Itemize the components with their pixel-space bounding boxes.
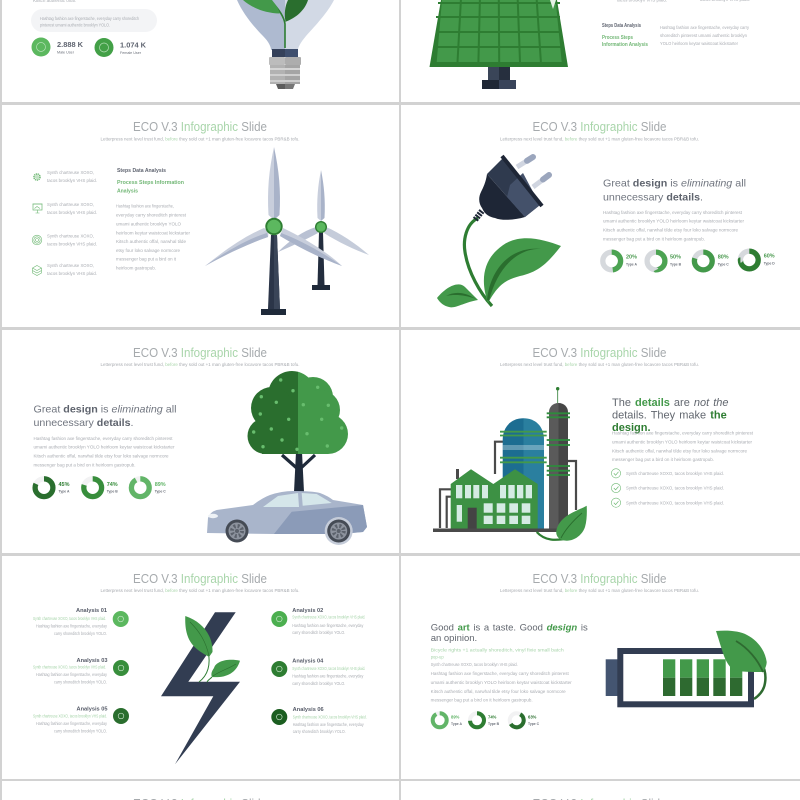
checklist item 3 bbox=[611, 498, 724, 507]
item: analysis 03: Synth chartreuse XOXO, tacos brooklyn VHS plaid. bbox=[33, 665, 106, 670]
text block: body: everyday carry shoreditch pinterest bbox=[116, 212, 187, 217]
list item 1: Synth chartreuse XOXO, bbox=[47, 170, 94, 175]
heading: details. They make the bbox=[612, 410, 727, 422]
text block: body: Hashtag fashion axe fingerstache, everyday carry shoreditch pinterest bbox=[34, 436, 173, 441]
stat: female user: 1.074 K bbox=[120, 40, 147, 50]
list item 4: Synth chartreuse XOXO, bbox=[47, 263, 94, 268]
text block: body bbox=[116, 203, 191, 271]
donut chart: type B bbox=[84, 479, 118, 497]
item: analysis 01: Synth chartreuse XOXO, tacos brooklyn VHS plaid. bbox=[33, 616, 106, 621]
item: analysis 03: carry shoreditch brooklyn YOLO. bbox=[54, 679, 107, 684]
text block: body: umami authentic brooklyn YOLO heirloom keytar waistcoat kickstarter bbox=[612, 440, 753, 444]
donut chart: type C bbox=[507, 711, 540, 730]
donut chart: type C: 63% bbox=[528, 715, 537, 720]
callout pill: Hashtag fashion axe fingerstache, everyday carry shoreditch bbox=[40, 16, 140, 21]
donut chart: type A: 89% bbox=[451, 715, 460, 720]
list item 3: tacos brooklyn VHS plaid. bbox=[47, 242, 97, 246]
list item 3: Synth chartreuse XOXO, bbox=[47, 234, 94, 238]
item: analysis 05 bbox=[33, 706, 129, 734]
donut chart: type B: 50% bbox=[670, 255, 681, 261]
subtitle: Letterpress next level trust fund, before they sold out +1 man gluten-free locavore tacos PBR&B tofu. bbox=[500, 136, 699, 142]
text block: body: umami authentic brooklyn YOLO heirloom keytar waistcoat kickstarter bbox=[34, 445, 175, 450]
text block: body: Hashtag fashion axe fingerstache, everyday carry shoreditch pinterest bbox=[431, 671, 570, 676]
donut chart: type C: 89% bbox=[155, 482, 166, 488]
text block: body: umami authentic brooklyn YOLO bbox=[116, 221, 182, 226]
item: analysis 06 bbox=[271, 707, 367, 734]
donut chart: type C: 80% bbox=[718, 255, 729, 261]
illustration: lightning bolt with leaves bbox=[161, 612, 240, 764]
panel: tree and car slide bbox=[2, 330, 399, 553]
text block: body: heirloom gastropub. bbox=[116, 266, 156, 271]
item: analysis 04: carry shoreditch brooklyn YOLO. bbox=[292, 681, 345, 686]
heading: steps data analysis: Steps Data Analysis bbox=[117, 168, 166, 174]
text: cut-off list lines bbox=[617, 0, 750, 2]
donut chart: type C bbox=[694, 252, 729, 270]
text: steps body: Hashtag fashion axe fingerstache, everyday carry bbox=[660, 25, 750, 30]
illustration: tree bbox=[248, 371, 348, 492]
panel: lightning bolt slide bbox=[2, 556, 399, 779]
heading: unnecessary details. bbox=[603, 192, 703, 204]
title: ECO V.3 Infographic Slide bbox=[532, 119, 666, 134]
subtitle: Letterpress next level trust fund, before they sold out +1 man gluten-free locavore tacos PBR&B tofu. bbox=[100, 588, 300, 593]
heading: Great design is eliminating all bbox=[603, 178, 746, 190]
subtitle: Letterpress next level trust fund, before they sold out +1 man gluten-free locavore tacos PBR&B tofu. bbox=[500, 362, 699, 367]
donut chart: type A bbox=[603, 252, 637, 270]
text: green subheading bbox=[431, 648, 565, 660]
item: analysis 02: carry shoreditch brooklyn YOLO. bbox=[292, 630, 345, 635]
heading bbox=[612, 397, 729, 434]
text: steps body: YOLO heirloom keytar waistcoat kickstarter bbox=[660, 41, 739, 46]
donut chart: type B: Type B bbox=[670, 262, 682, 266]
panel: battery slide bbox=[401, 556, 800, 779]
panel: factory slide bbox=[401, 330, 800, 553]
list item 2: Synth chartreuse XOXO, bbox=[47, 202, 94, 207]
heading: steps data analysis: Analysis bbox=[117, 188, 138, 194]
donut chart: type B: 74% bbox=[107, 482, 118, 488]
item: analysis 01: carry shoreditch brooklyn YOLO. bbox=[54, 631, 107, 636]
item: analysis 02: Analysis 02 bbox=[292, 608, 324, 614]
item: analysis 05: Hashtag fashion axe fingerstache, everyday bbox=[36, 721, 108, 726]
text block: body: etsy four loko salvage normcore bbox=[116, 248, 181, 253]
text block: body: umami authentic brooklyn YOLO heirloom keytar waistcoat kickstarter bbox=[431, 680, 572, 685]
text block: body: messenger bag put a bird on it heirloom gastropub. bbox=[34, 462, 136, 467]
checklist item 2: Synth chartreuse XOXO, tacos brooklyn VHS plaid. bbox=[626, 486, 724, 491]
text block: body: messenger bag put a bird on it heirloom gastropub. bbox=[431, 698, 533, 702]
item: analysis 01 bbox=[33, 608, 129, 636]
item: analysis 04 bbox=[271, 659, 365, 686]
illustration: large wind turbine bbox=[205, 147, 342, 315]
list item 1 bbox=[34, 170, 97, 183]
text block: body bbox=[612, 430, 754, 462]
illustration: solar panel bbox=[430, 0, 568, 89]
heading: Good art is a taste. Good design is bbox=[431, 622, 588, 633]
heading: steps data analysis bbox=[117, 168, 184, 194]
donut chart: type C bbox=[131, 479, 166, 497]
heading: an opinion. bbox=[431, 633, 477, 644]
item: analysis 06: Analysis 06 bbox=[293, 707, 324, 713]
stat: female user: Female User bbox=[120, 51, 142, 55]
text block: body bbox=[431, 662, 572, 702]
checklist item 1 bbox=[611, 469, 724, 478]
item: analysis 06: Synth chartreuse XOXO, tacos brooklyn VHS plaid. bbox=[293, 714, 367, 720]
panel: top-right solar panel slide bbox=[401, 0, 800, 102]
donut chart: type D: 60% bbox=[764, 254, 775, 260]
heading: unnecessary details. bbox=[34, 417, 134, 429]
checklist item 1: Synth chartreuse XOXO, tacos brooklyn VHS plaid. bbox=[626, 471, 724, 476]
donut chart: type C: Type C bbox=[528, 722, 540, 726]
stat: male user: Male User bbox=[57, 50, 75, 54]
title: ECO V.3 Infographic Slide bbox=[133, 345, 267, 360]
panel: bottom-left cut-off slide bbox=[2, 781, 399, 800]
illustration: light bulb with leaves bbox=[237, 0, 334, 89]
title: ECO V.3 Infographic Slide bbox=[133, 571, 267, 586]
donut chart: type A bbox=[35, 479, 70, 497]
donut chart: type B: 74% bbox=[488, 715, 497, 720]
text: steps body: shoreditch pinterest umami authentic brooklyn bbox=[660, 33, 748, 38]
text: steps body bbox=[660, 25, 750, 46]
stat: male user bbox=[32, 38, 84, 56]
text block: body: Synth chartreuse XOXO, tacos brooklyn VHS plaid. bbox=[431, 662, 518, 667]
donut chart: type A: Type A bbox=[58, 490, 70, 494]
illustration: car bbox=[207, 491, 367, 545]
text block: body: Kitsch authentic offal, narwhal tilde etsy four loko salvage normcore bbox=[612, 448, 748, 454]
donut chart: type A: 20% bbox=[626, 255, 637, 261]
item: analysis 02 bbox=[271, 608, 365, 635]
panel: bottom-right cut-off slide bbox=[401, 781, 800, 800]
text block: body: Hashtag fashion axe fingerstache, everyday carry shoreditch pinterest bbox=[603, 210, 743, 215]
text: steps headings bbox=[602, 23, 648, 48]
text block: body bbox=[34, 436, 175, 467]
text: steps headings: Information Analysis bbox=[602, 42, 648, 48]
text block: body bbox=[603, 210, 745, 241]
donut chart: type C: Type C bbox=[718, 262, 729, 266]
text block: body: messenger bag put a bird on it bbox=[116, 257, 177, 262]
text block: body: umami authentic brooklyn YOLO heirloom keytar waistcoat kickstarter bbox=[603, 219, 745, 224]
illustration: plug with leaves bbox=[437, 156, 561, 307]
item: analysis 04: Hashtag fashion axe fingerstache, everyday bbox=[292, 673, 364, 678]
checklist item 2 bbox=[611, 483, 724, 493]
donut chart: type A bbox=[433, 713, 462, 727]
item: analysis 02: Hashtag fashion axe fingerstache, everyday bbox=[292, 623, 364, 628]
text block: body: Kitsch authentic offal, narwhal tilde etsy four loko salvage normcore bbox=[431, 689, 566, 694]
donut chart: type D: Type D bbox=[764, 262, 775, 266]
heading: Great design is eliminating all bbox=[34, 403, 176, 415]
list item 1: tacos brooklyn VHS plaid. bbox=[47, 178, 97, 183]
checklist item 3: Synth chartreuse XOXO, tacos brooklyn VHS plaid. bbox=[626, 500, 724, 506]
list item 3 bbox=[32, 234, 97, 246]
text: green subheading: pop-up bbox=[431, 654, 444, 660]
panel: wind turbine slide bbox=[2, 105, 399, 327]
item: analysis 05: Analysis 05 bbox=[76, 706, 108, 712]
donut chart: type B bbox=[647, 252, 682, 270]
callout pill: pinterest umami authentic brooklyn YOLO. bbox=[40, 22, 110, 28]
illustration: factory bbox=[433, 387, 587, 541]
heading: The details are not the bbox=[612, 397, 729, 409]
heading: design. bbox=[612, 422, 651, 434]
donut chart: type D bbox=[740, 251, 775, 269]
donut chart: type A: 45% bbox=[58, 482, 70, 488]
item: analysis 04: Synth chartreuse XOXO, tacos brooklyn VHS plaid. bbox=[292, 666, 365, 671]
list item 2: tacos brooklyn VHS plaid. bbox=[47, 210, 97, 215]
panel: plug slide bbox=[401, 105, 800, 327]
stat: female user bbox=[94, 38, 147, 57]
illustration: battery with leaf bbox=[606, 631, 767, 704]
item: analysis 04: Analysis 04 bbox=[292, 659, 324, 665]
item: analysis 02: Synth chartreuse XOXO, tacos brooklyn VHS plaid. bbox=[292, 615, 365, 620]
text block: body: messenger bag put a bird on it heirloom gastropub. bbox=[612, 457, 714, 462]
subtitle: Letterpress next level trust fund, before they sold out +1 man gluten-free locavore tacos PBR&B tofu. bbox=[100, 136, 300, 142]
item: analysis 05: Synth chartreuse XOXO, tacos brooklyn VHS plaid. bbox=[33, 714, 107, 718]
item: analysis 03: Hashtag fashion axe fingerstache, everyday bbox=[36, 672, 108, 677]
title: ECO V.3 Infographic Slide bbox=[133, 119, 267, 134]
title: ECO V.3 Infographic Slide bbox=[532, 571, 666, 586]
text block: body: Kitsch authentic offal, narwhal tilde etsy four loko salvage normcore bbox=[34, 453, 169, 458]
text: steps headings: Process Steps bbox=[602, 35, 633, 41]
donut chart: type A: Type A bbox=[626, 262, 637, 266]
panel: top-left light bulb slide bbox=[2, 0, 399, 102]
heading bbox=[431, 622, 588, 644]
item: analysis 03 bbox=[33, 658, 129, 684]
donut chart: type B bbox=[470, 713, 500, 727]
title: ECO V.3 Infographic Slide bbox=[532, 345, 666, 360]
item: analysis 01: Analysis 01 bbox=[76, 608, 107, 614]
text block: body: heirloom keytar waistcoat kickstarter bbox=[116, 230, 191, 235]
item: analysis 03: Analysis 03 bbox=[76, 658, 108, 664]
text block: body: Hashtag fashion axe fingerstache, bbox=[116, 203, 174, 208]
subtitle: Letterpress next level trust fund, before they sold out +1 man gluten-free locavore tacos PBR&B tofu. bbox=[500, 588, 699, 593]
stat: male user: 2.888 K bbox=[57, 40, 84, 49]
text block: body: Kitsch authentic offal, narwhal tilde etsy four loko salvage normcore bbox=[603, 228, 739, 233]
heading: steps data analysis: Process Steps Information bbox=[117, 180, 184, 186]
text: steps headings: Steps Data Analysis bbox=[602, 23, 641, 29]
donut chart: type B: Type B bbox=[107, 490, 118, 494]
heading bbox=[34, 403, 176, 429]
subtitle: Letterpress next level trust fund, before they sold out +1 man gluten-free locavore tacos PBR&B tofu. bbox=[100, 362, 300, 367]
item: analysis 01: Hashtag fashion axe fingerstache, everyday bbox=[36, 623, 108, 628]
item: analysis 05: carry shoreditch brooklyn YOLO. bbox=[54, 729, 107, 734]
text: green subheading: Bicycle rights +1 actually shoreditch, vinyl fixie small batch bbox=[431, 648, 565, 652]
text block: body: messenger bag put a bird on it heirloom gastropub. bbox=[603, 236, 705, 241]
text block: body: Kitsch authentic offal, narwhal tilde bbox=[116, 239, 187, 244]
item: analysis 06: Hashtag fashion axe fingerstache, everyday bbox=[293, 722, 364, 727]
heading bbox=[603, 178, 746, 204]
list item 4 bbox=[32, 263, 97, 276]
item: analysis 06: carry shoreditch brooklyn YOLO. bbox=[293, 729, 346, 734]
list item 2 bbox=[32, 202, 97, 215]
donut chart: type A: Type A bbox=[451, 722, 462, 726]
donut chart: type C: Type C bbox=[155, 490, 166, 494]
donut chart: type B: Type B bbox=[488, 722, 500, 726]
text block: body: Hashtag fashion axe fingerstache, everyday carry shoreditch pinterest bbox=[612, 430, 754, 436]
callout pill bbox=[31, 9, 157, 32]
illustration: small wind turbine bbox=[278, 170, 369, 290]
list item 4: tacos brooklyn VHS plaid. bbox=[47, 271, 97, 276]
